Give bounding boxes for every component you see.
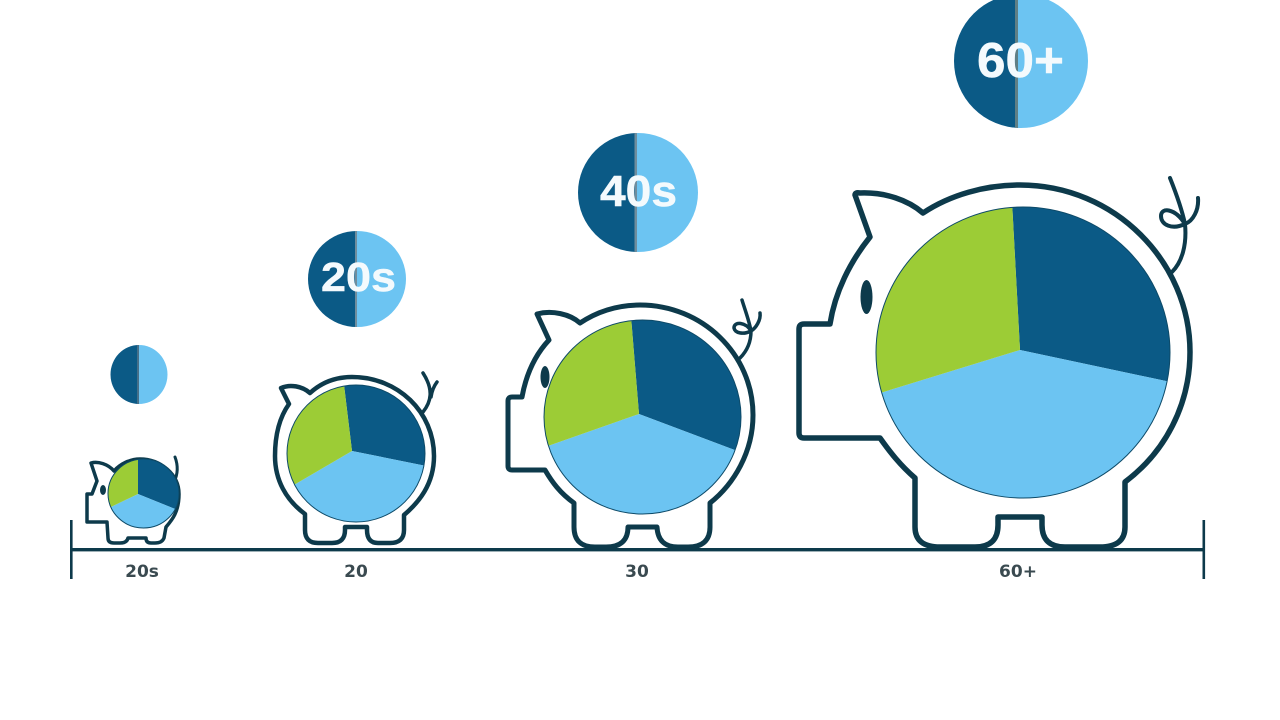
eye [100,485,106,495]
age label: 20: 20 [344,562,368,582]
pie chart [876,206,1170,498]
piggy bank: 60+ [799,164,1208,547]
pig body outline [508,305,753,547]
age label: 30: 30 [625,562,649,582]
pig body outline [799,185,1190,547]
coin: 20s: 20s [321,254,396,300]
tail [174,457,177,482]
pig body outline [275,377,434,543]
age label: 60+: 60+ [999,562,1037,582]
pie chart [544,320,742,514]
infographic: piggy banks growing with age [70,0,1206,579]
pie chart [286,384,426,522]
coin: 40s [578,133,698,252]
eye [540,366,550,388]
age label: 20s: 20s [125,562,159,582]
piggy bank: 20 [272,371,439,546]
tail [734,300,760,358]
pie chart [108,458,180,528]
eye [860,280,872,314]
piggy bank: 30 [508,280,772,547]
coin: 60+ [954,0,1088,128]
pig body outline [87,459,179,543]
piggy bank: smallest [85,456,181,545]
tail [1161,178,1198,272]
coin: 20s [308,231,406,327]
age axis [70,520,1205,579]
coin: unlabelled [110,345,168,404]
tail [423,373,437,412]
coin: 40s: 40s [600,167,677,216]
coin: 60+: 60+ [977,34,1064,88]
